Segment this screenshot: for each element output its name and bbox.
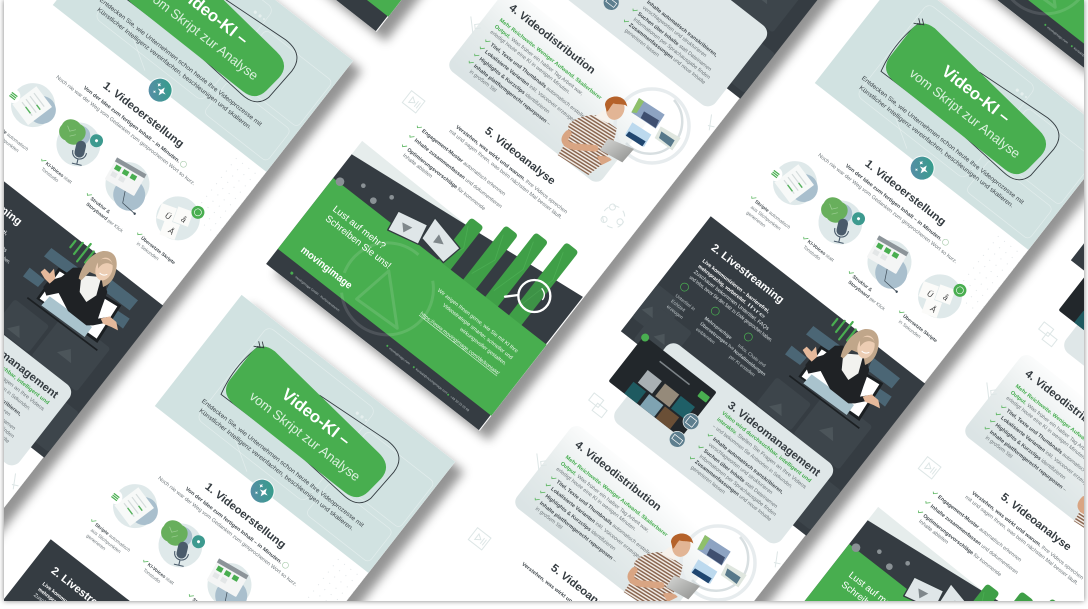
section 3 list: generieren lassen	[689, 465, 726, 496]
caption voices: KI-Voices statt	[146, 562, 175, 587]
call to action art	[163, 0, 501, 32]
section 5 list: Optimierungsvorschläge für kommende	[406, 147, 486, 212]
hero panel	[53, 0, 353, 172]
rotated content	[462, 0, 1088, 609]
caption storyboard	[842, 270, 891, 313]
heading 2: 2. Livestreaming	[709, 242, 786, 306]
section 3 lead	[0, 333, 50, 419]
CTA headline: Lust auf mehr?	[330, 204, 388, 252]
footer: movingimage.com	[388, 347, 411, 366]
icon: voice	[45, 111, 109, 175]
section 3 list: Informationen per Sprachausgabe finden	[632, 17, 711, 81]
section 2 feature captions: Untertitel in	[674, 293, 696, 312]
caption script: aus Stichpunkten	[749, 205, 782, 232]
icon: translation: å	[179, 215, 189, 225]
section 3 list	[684, 432, 791, 529]
section 2 text: mehrsprachig, vorbereitet.	[697, 264, 748, 306]
section 3 lead: interaktiv.	[715, 417, 738, 437]
faint icons	[0, 309, 31, 609]
section 5 lead: Verstehen, was wirkt und warum. Ihre Videos sprechen	[970, 490, 1084, 581]
section 5 list: Engagement-Muster automatisch erkennen	[420, 128, 506, 197]
caption storyboard: Storyboard per Klick	[847, 280, 887, 313]
caption script: generieren	[745, 210, 767, 229]
section 2 text	[0, 180, 24, 266]
page 6 CTA corner (top right)	[924, 0, 1088, 110]
section 4 lead: erledigt heute eine KI in wenigen Minuten.	[489, 29, 571, 96]
icon: translation: å	[941, 293, 951, 303]
section 4 lead: Was früher ein halber Tag Arbeit war,	[510, 37, 584, 97]
section 3 panel	[544, 0, 771, 110]
hero panel	[155, 295, 455, 573]
dots decoration	[184, 152, 263, 239]
hero description: Entdecken Sie, wie Unternehmen schon heute ihre Videoprozesse mit	[860, 75, 1025, 206]
section 4 list	[978, 404, 1088, 514]
section 1 lead: Von der Idee zum fertigen Inhalt – in Minuten.	[184, 486, 283, 566]
section 4 lead: Mehr Reichweite. Weniger Aufwand. Skalierbarer	[564, 455, 669, 539]
caption translation	[130, 231, 177, 272]
icon: script	[99, 471, 167, 538]
section 4 list: Highlights & Kurzclips identifizieren	[544, 493, 617, 552]
CTA headline	[839, 570, 917, 609]
faint icons	[402, 0, 727, 263]
footer: +49 30 33 09 68	[449, 395, 470, 412]
rotated content	[782, 145, 1088, 609]
section 4 list: in großem Stil	[468, 69, 497, 94]
hero description: Entdecken Sie, wie Unternehmen schon heute ihre Videoprozesse mit	[98, 0, 263, 128]
section 4 list: Titel, Texte und Thumbnails automatisch erstellen	[489, 42, 588, 122]
section 5 list	[912, 490, 1026, 591]
icon: voice	[807, 189, 871, 253]
page 5 (far right sheet)	[782, 0, 1088, 609]
section 2 dark panel	[1042, 145, 1088, 465]
section 2 feature captions: einblenden	[695, 327, 716, 345]
caption script: Skripte automatisch	[93, 522, 132, 554]
hero subtitle: vom Skript zur Analyse	[907, 66, 1023, 161]
caption translation: in Sekunden	[135, 241, 160, 262]
icon: script	[0, 70, 65, 137]
rotated content	[266, 0, 859, 431]
section 2 feature captions	[0, 215, 10, 304]
hero description line 2: Künstlicher Intelligenz vereinfachen, beschleunigen und skalieren.	[96, 6, 253, 132]
hero title: Video-KI –	[938, 62, 1014, 127]
rotated content	[0, 295, 456, 609]
icon: translation: Ü	[925, 289, 935, 300]
caption voices: Tonstudio	[142, 567, 162, 585]
section 5 list	[396, 124, 510, 225]
call to action art	[266, 105, 604, 431]
section 4 lead: Was früher ein halber Tag Arbeit war,	[576, 474, 650, 534]
caption voices: KI-Voices statt	[44, 161, 73, 186]
section 2 dark panel	[526, 0, 859, 99]
caption voices	[797, 235, 835, 269]
icon: storyboard	[196, 553, 263, 609]
caption translation: Übersetzte Skripte	[901, 313, 939, 344]
photos	[625, 98, 681, 150]
caption voices	[137, 558, 175, 592]
footer: kontakt@movingimage.com	[415, 367, 449, 395]
caption script	[740, 195, 792, 242]
caption translation: Übersetzte Skripte	[139, 235, 177, 266]
section 3 panel	[1060, 268, 1088, 476]
woman presenter	[785, 326, 900, 428]
CTA text	[418, 288, 519, 377]
hero subtitle: vom Skript zur Analyse	[247, 389, 363, 484]
section 4 list: in großem Stil	[984, 435, 1013, 460]
CTA text: https://www.movingimage.com/de/kontakt/	[419, 311, 501, 377]
heading 5: 5. Videoanalyse	[482, 125, 557, 187]
section 2 dark panel	[0, 539, 265, 609]
section 4 list: in großem Stil	[534, 506, 563, 531]
caption voices: Tonstudio	[802, 244, 822, 262]
icon: translation: Å	[928, 304, 939, 315]
section 5 list: Inhalte ableiten	[401, 153, 433, 180]
section 3 list: Inhalte automatisch transkribieren,	[711, 437, 785, 496]
section 5 lead: Verstehen, was wirkt und warum. Ihre Videos sprechen	[454, 124, 568, 215]
CTA text: Videostrategie smarter, schneller und	[441, 303, 514, 361]
section 2 feature captions: Mehrsprachige	[703, 316, 733, 340]
section 4 panel	[512, 422, 727, 609]
hero description line 2: Künstlicher Intelligenz vereinfachen, beschleunigen und skalieren.	[858, 84, 1015, 210]
badge icon	[143, 73, 178, 108]
section 2 feature captions: Notfallmeldungen	[732, 349, 767, 377]
section 3 list: verschlagworten und strukturieren	[707, 442, 774, 496]
logo: movingimage	[298, 244, 355, 292]
section 4 list: Highlights & Kurzclips identifizieren	[478, 56, 551, 115]
sound wave	[828, 313, 864, 348]
caption script: Skripte automatisch	[753, 199, 792, 231]
page 2 (top-middle sheet)	[266, 0, 1049, 431]
section 2 dark panel	[592, 216, 925, 536]
section 2 feature checks	[679, 281, 754, 343]
sheet	[163, 0, 946, 32]
dots decoration	[946, 230, 1025, 317]
heading 5: 5. Videoanalyse	[998, 491, 1073, 553]
section 3 list: Informationen per Sprachausgabe finden	[698, 454, 777, 518]
faint icons	[468, 387, 793, 609]
section 4 lead: Output.	[559, 461, 578, 478]
caption translation	[892, 309, 939, 350]
man with tablet	[624, 533, 700, 609]
CTA headline: Schreiben Sie uns!	[323, 213, 393, 272]
section 2 text: Zuschauer bekommen Untertitel, FAQs	[692, 269, 770, 332]
section 4 panel	[446, 0, 661, 185]
section 2 text	[32, 581, 119, 609]
section 3 list: Suchen über Inhalte statt Dateinamen	[702, 448, 778, 510]
photos	[691, 535, 747, 587]
section 3 panel	[610, 339, 837, 547]
section 5 lead: mit und sagen Ihnen, was beim nächsten Mal besser läuft.	[963, 495, 1079, 587]
section 4 list: Inhalte plattformgerecht repurposen –	[538, 501, 617, 564]
CTA cards and magnifier	[852, 543, 1066, 609]
section 1 lead: Von der Idee zum fertigen Inhalt – in Minuten.	[82, 85, 181, 165]
heading 4: 4. Videodistribution	[507, 2, 598, 77]
section 4 lead: erledigt heute eine KI in wenigen Minuten.	[555, 466, 637, 533]
caption translation: in Sekunden	[897, 319, 922, 340]
rotated content	[0, 0, 354, 609]
section 4 lead: Output.	[1009, 390, 1028, 407]
man with tablet	[558, 96, 634, 175]
icon: clock	[281, 561, 290, 569]
sheet	[924, 0, 1088, 110]
section 4 lead: Mehr Reichweite. Weniger Aufwand. Skalierbarer	[498, 18, 603, 102]
footer: movingimage GmbH · Kurfürstendamm	[294, 275, 341, 313]
caption storyboard	[80, 192, 129, 235]
section 4 list: Lokalisierte Varianten inkl. Voiceover erzeugen	[549, 486, 643, 561]
badge icon	[245, 474, 280, 509]
section 3 list	[618, 0, 725, 92]
section 5 list: Optimierungsvorschläge für kommende	[922, 513, 1002, 578]
section 3 list: generieren lassen	[623, 28, 660, 59]
caption storyboard	[186, 593, 214, 609]
section 3 list: Zusammenfassungen und neue Inhalte	[693, 459, 772, 523]
dots decoration	[286, 553, 365, 609]
section 1 text: Noch nie war der Weg vom Gedanken zum gesprochenen Wort so kurz.	[816, 153, 958, 265]
call to action art	[782, 471, 1088, 609]
screenshot	[534, 0, 657, 14]
screenshot	[600, 332, 723, 451]
section 5 list: Engagement-Muster automatisch erkennen	[936, 494, 1022, 563]
caption storyboard: Struktur &	[89, 196, 112, 216]
icon: translation: Å	[166, 226, 177, 237]
presenter ring	[615, 89, 689, 163]
caption script	[0, 117, 30, 164]
section 2 feature captions: Infos, Chats und	[737, 343, 767, 368]
section 2 text: Live kommunizieren – barrierefrei,	[701, 258, 771, 315]
heading 1: 1. Videoerstellung	[203, 481, 288, 551]
caption voices: KI-Voices statt	[806, 239, 835, 264]
rotated content	[924, 0, 1088, 110]
section 2 text: Ihre	[745, 302, 767, 320]
heading 1: 1. Videoerstellung	[863, 158, 948, 228]
section 5 list: Inhalte zusammenfassen und dokumentieren	[413, 138, 503, 210]
section 4 panel	[962, 351, 1088, 551]
sheet	[0, 0, 353, 609]
section 3 list: Suchen über Inhalte statt Dateinamen	[636, 11, 712, 73]
icon: clock	[179, 160, 188, 168]
section 4 list	[528, 475, 654, 585]
section 5 list: Inhalte ableiten	[917, 519, 949, 546]
woman presenter	[23, 248, 138, 350]
footer	[1046, 26, 1088, 74]
footer: movingimage.com	[1046, 26, 1069, 45]
hero description: Entdecken Sie, wie Unternehmen schon heute ihre Videoprozesse mit	[200, 398, 365, 529]
caption voices	[35, 157, 73, 191]
sheet	[0, 295, 455, 609]
icon: translation	[146, 186, 210, 251]
heading 4: 4. Videodistribution	[573, 439, 664, 514]
hero title: Video-KI –	[278, 385, 354, 450]
section 2 feature captions: Echtzeit	[670, 298, 687, 313]
heading 1: 1. Videoerstellung	[101, 80, 186, 150]
hero description line 2: Künstlicher Intelligenz vereinfachen, beschleunigen und skalieren.	[198, 407, 355, 533]
section 5 lead: mit und sagen Ihnen, was beim nächsten Mal besser läuft.	[447, 129, 563, 221]
icon: clock	[941, 238, 950, 246]
section 4 list	[462, 38, 588, 148]
faint icons	[918, 316, 1088, 609]
section 1 text: Noch nie war der Weg vom Gedanken zum gesprochenen Wort so kurz.	[156, 476, 298, 588]
caption voices: Tonstudio	[40, 166, 60, 184]
section 4 lead: erledigt heute eine KI in wenigen Minuten.	[1005, 395, 1084, 462]
caption script: aus Stichpunkten	[89, 528, 122, 555]
caption storyboard: Storyboard per Klick	[85, 202, 125, 235]
sheet	[782, 0, 1088, 609]
man with tablet	[1074, 462, 1088, 541]
screenshot	[1050, 261, 1088, 380]
sheet	[266, 0, 1049, 431]
CTA text: Wir zeigen Ihnen gerne, wie Sie mit KI Ihre	[436, 288, 519, 354]
page 3 (bottom-middle sheet)	[0, 295, 456, 609]
hero panel	[815, 0, 1088, 250]
section 3 list: Inhalte automatisch transkribieren,	[645, 0, 719, 59]
caption script	[80, 518, 132, 565]
section 2 feature captions	[665, 293, 772, 382]
section 3 lead: – und bekommen Sie Antworten in Sekunden.	[711, 424, 794, 490]
section 3 lead: Stellen Sie Fragen an Ihre Videos	[736, 433, 808, 491]
caption script: generieren	[85, 533, 107, 552]
page 0 CTA corner (top)	[163, 0, 946, 32]
caption storyboard: Struktur &	[851, 274, 874, 294]
section 2 feature captions: erzeugen	[666, 304, 685, 320]
section 4 list: Inhalte plattformgerecht repurposen –	[472, 64, 551, 127]
sheet	[332, 0, 1088, 609]
icon: storyboard	[94, 152, 161, 218]
section 2 text	[688, 258, 786, 344]
section 5 list: Inhalte zusammenfassen und dokumentieren	[929, 504, 1019, 576]
CTA text: wirkungsvoller gestalten.	[458, 327, 508, 367]
icon: translation: Ü	[163, 211, 173, 222]
section 4 lead: Output.	[493, 24, 512, 41]
icon: script	[759, 148, 827, 215]
badge icon	[905, 151, 940, 186]
section 4 list: Inhalte plattformgerecht repurposen –	[988, 430, 1067, 493]
heading 3: 3. Videomanagement	[725, 399, 823, 479]
section 4 list: Titel, Texte und Thumbnails automatisch erstellen	[555, 479, 654, 559]
section 2 dark panel	[0, 138, 163, 458]
section 2 feature captions: Übersetzungen live	[699, 320, 736, 351]
section 3 list	[0, 354, 29, 451]
call to action art	[924, 0, 1088, 110]
page 1 (left sheet)	[0, 0, 354, 609]
section 4 list: Highlights & Kurzclips identifizieren	[994, 422, 1067, 481]
section 3 lead: Video wird durchsuchbar, intelligent und	[720, 411, 812, 484]
presenter ring	[681, 526, 755, 600]
section 1 text: Noch nie war der Weg vom Gedanken zum gesprochenen Wort so kurz.	[54, 75, 196, 187]
icon: voice	[147, 512, 211, 576]
section 3 list: Zusammenfassungen und neue Inhalte	[627, 22, 706, 86]
footer	[294, 274, 470, 413]
icon: storyboard	[856, 230, 923, 296]
section 4 list: Lokalisierte Varianten inkl. Voiceover erzeugen	[483, 49, 577, 124]
section 3 list: verschlagworten und strukturieren	[641, 5, 708, 59]
icon: translation	[908, 264, 972, 329]
CTA cards and magnifier	[336, 177, 550, 312]
section 3 panel	[0, 261, 75, 469]
page 4 (right sheet)	[332, 0, 1088, 609]
section 2 feature captions: per KI erstellen	[728, 354, 756, 378]
section 2 text: und Infos, bevor Sie den Satz zu Ende gesprochen haben.	[688, 275, 774, 344]
section 1 lead: Von der Idee zum fertigen Inhalt – in Minuten.	[844, 163, 943, 243]
sound wave	[66, 235, 102, 270]
